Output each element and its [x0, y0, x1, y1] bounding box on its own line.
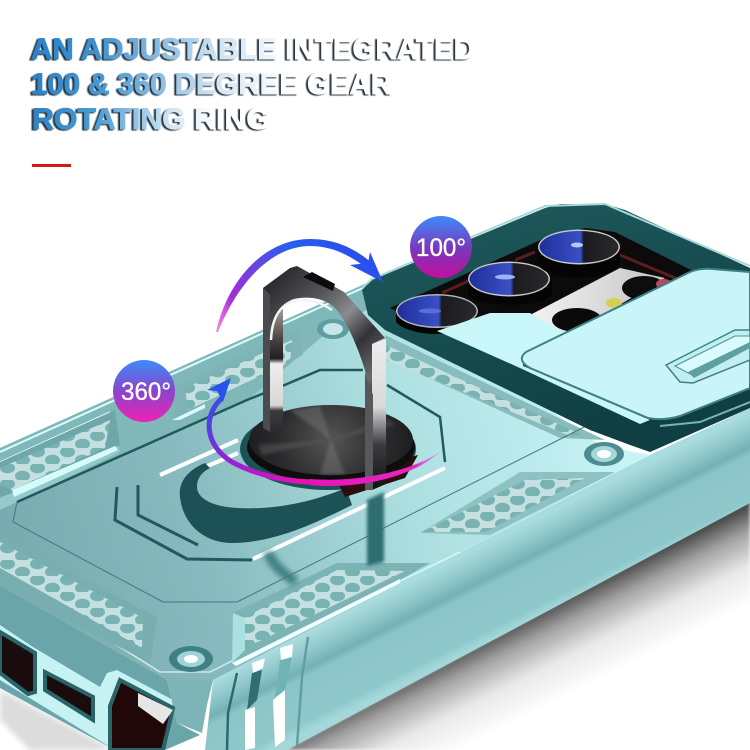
ring feet	[335, 455, 418, 497]
slider lower stripes	[660, 402, 750, 426]
engraved octagon lines	[17, 370, 445, 560]
camera plate	[530, 268, 665, 340]
arch right leg	[372, 339, 386, 490]
small sensors	[552, 276, 672, 332]
ring arch	[263, 266, 386, 490]
curved reflection	[268, 552, 296, 582]
ring disc rim	[247, 411, 415, 483]
screw top left	[317, 319, 349, 339]
ring disc	[249, 405, 413, 475]
corner chamfer	[167, 680, 213, 733]
side port three	[110, 680, 173, 750]
arch top band	[263, 266, 385, 400]
case back face	[0, 283, 650, 680]
mesh panel bottom centre	[232, 552, 460, 666]
raised top edge strip	[0, 283, 385, 510]
lens three	[538, 230, 620, 278]
ring recess slot	[180, 463, 352, 543]
grooves on corner	[227, 637, 308, 750]
arch left leg	[270, 304, 283, 434]
side port one	[0, 632, 35, 694]
title: ROTATING RING	[32, 103, 270, 136]
mesh panel top left	[0, 410, 120, 497]
mesh panel lower right	[420, 472, 615, 535]
drop shadow under phone	[285, 500, 750, 750]
left side wall	[0, 585, 200, 750]
lens two	[468, 262, 552, 305]
mesh panel upper middle	[172, 328, 303, 420]
red accent line	[32, 164, 71, 167]
title: 100 & 360 DEGREE GEAR	[31, 68, 392, 101]
mesh panel upper right	[385, 335, 605, 440]
screw right	[584, 442, 624, 466]
side port two	[45, 672, 93, 720]
ring reflection band	[367, 492, 384, 566]
engraved outline thin	[13, 408, 622, 602]
camera island dark rim	[362, 204, 750, 452]
screw bottom	[169, 646, 213, 672]
badge: 360 degrees: 360°	[121, 378, 171, 406]
lens cover wedge	[437, 313, 650, 424]
shadow under left edge	[0, 690, 115, 750]
recess red edges	[442, 252, 680, 293]
title: AN ADJUSTABLE INTEGRATED	[31, 33, 475, 66]
arch outer dark strip	[263, 288, 270, 432]
mesh panel lower left	[0, 535, 157, 663]
arch black cutout	[303, 272, 335, 291]
phone case	[0, 204, 750, 750]
case right side wall	[205, 408, 750, 750]
camera recess	[390, 228, 695, 358]
arrow: 100 degree sweep	[216, 239, 383, 332]
arrow: 360 degree sweep	[207, 378, 441, 486]
ring base halo	[240, 408, 416, 490]
badge: 100 degrees: 100°	[416, 234, 466, 262]
arch inner leg	[365, 372, 373, 490]
white highlight strokes	[160, 440, 445, 559]
left lower edge strip	[0, 572, 250, 672]
lens one	[396, 294, 478, 334]
arch white inner rim	[271, 300, 332, 340]
slider knob	[666, 330, 750, 383]
camera slider panel	[522, 269, 750, 419]
badge: 360 degrees	[113, 360, 175, 422]
badge: 100 degrees	[410, 216, 472, 278]
title	[31, 33, 475, 136]
